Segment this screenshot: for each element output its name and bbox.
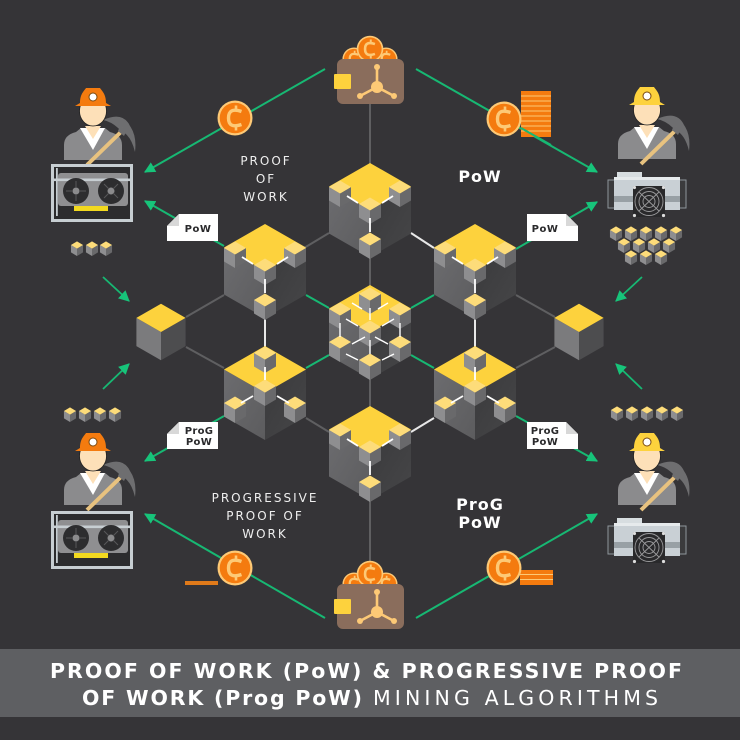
heading: progressive proof of work: PROGRESSIVE <box>212 491 318 505</box>
coin: upper right <box>486 102 522 136</box>
heading: proof of work: OF <box>256 172 276 186</box>
heading: ProG PoW: ProG <box>456 495 504 514</box>
arrow: PoW label upper left <box>145 201 224 246</box>
arrow: bottom wallet to right miner <box>416 514 597 618</box>
label: PoW upper left: PoW <box>185 224 211 235</box>
arrow: lower right miner to right node <box>616 364 642 389</box>
miner: lower left with GPU rig <box>52 433 135 568</box>
miner: upper right with ASIC <box>608 87 689 217</box>
heading: progressive proof of work: WORK <box>242 527 288 541</box>
arrow: ProgPoW label lower right <box>516 416 597 461</box>
coin stack: lower right <box>520 570 553 585</box>
cube: top <box>329 163 411 259</box>
coin stack: upper right <box>521 91 551 145</box>
title banner <box>0 649 740 717</box>
label: PoW upper right <box>527 214 578 241</box>
label: ProG PoW lower left: PoW <box>186 437 212 448</box>
cube: lower right <box>434 346 516 440</box>
cube: upper left <box>224 224 306 320</box>
heading: PoW: PoW <box>458 167 502 186</box>
mined blocks: upper right <box>610 226 682 265</box>
heading: ProG PoW: PoW <box>458 513 502 532</box>
heading: ProG PoW <box>456 495 504 532</box>
wallet: top <box>334 36 404 104</box>
coin: lower right <box>486 550 522 586</box>
label: ProG PoW lower left: ProG <box>185 426 213 437</box>
arrow: top wallet to right miner <box>416 69 597 172</box>
heading: proof of work <box>240 154 292 204</box>
label: ProG PoW lower right: PoW <box>532 437 558 448</box>
cube: upper right <box>434 224 516 320</box>
wallet: bottom <box>334 561 404 629</box>
arrow: top wallet to left miner <box>145 69 325 172</box>
title banner: PROOF OF WORK (PoW) & PROGRESSIVE PROOF <box>50 659 682 683</box>
miner: lower right with ASIC <box>608 433 689 563</box>
arrow: lower left miner to left node <box>103 364 129 389</box>
label: PoW upper left <box>167 214 218 241</box>
heading: proof of work: PROOF <box>240 154 292 168</box>
mined blocks: lower left <box>64 407 121 422</box>
mined blocks: upper left <box>71 241 112 256</box>
mined blocks: lower right <box>611 406 683 421</box>
cube: lower left <box>224 346 306 440</box>
title banner: MINING ALGORITHMS <box>373 686 658 710</box>
arrow: upper left miner to left node <box>103 277 129 301</box>
heading: proof of work: WORK <box>243 190 289 204</box>
arrow: ProgPoW label lower left <box>145 416 224 461</box>
coin stack: lower left <box>185 581 218 585</box>
node cube: right <box>554 304 604 360</box>
label: PoW upper right: PoW <box>532 224 558 235</box>
miner: upper left with GPU rig <box>52 88 135 220</box>
heading: progressive proof of work <box>212 491 318 541</box>
arrow: bottom wallet to left miner <box>145 514 325 618</box>
label: ProG PoW lower right <box>527 422 578 449</box>
label: ProG PoW lower left <box>167 422 218 449</box>
cube: centre <box>329 285 411 380</box>
coin: upper left <box>218 100 252 136</box>
connector lines between cubes <box>186 104 555 562</box>
cube: bottom <box>329 406 411 502</box>
arrow: upper right miner to right node <box>616 277 642 301</box>
label: ProG PoW lower right: ProG <box>531 426 559 437</box>
coin: lower left <box>218 550 252 586</box>
node cube: left <box>136 304 186 360</box>
heading: progressive proof of work: PROOF OF <box>226 509 304 523</box>
arrow: PoW label upper right <box>516 202 597 249</box>
title banner: OF WORK (Prog PoW) <box>82 686 362 710</box>
